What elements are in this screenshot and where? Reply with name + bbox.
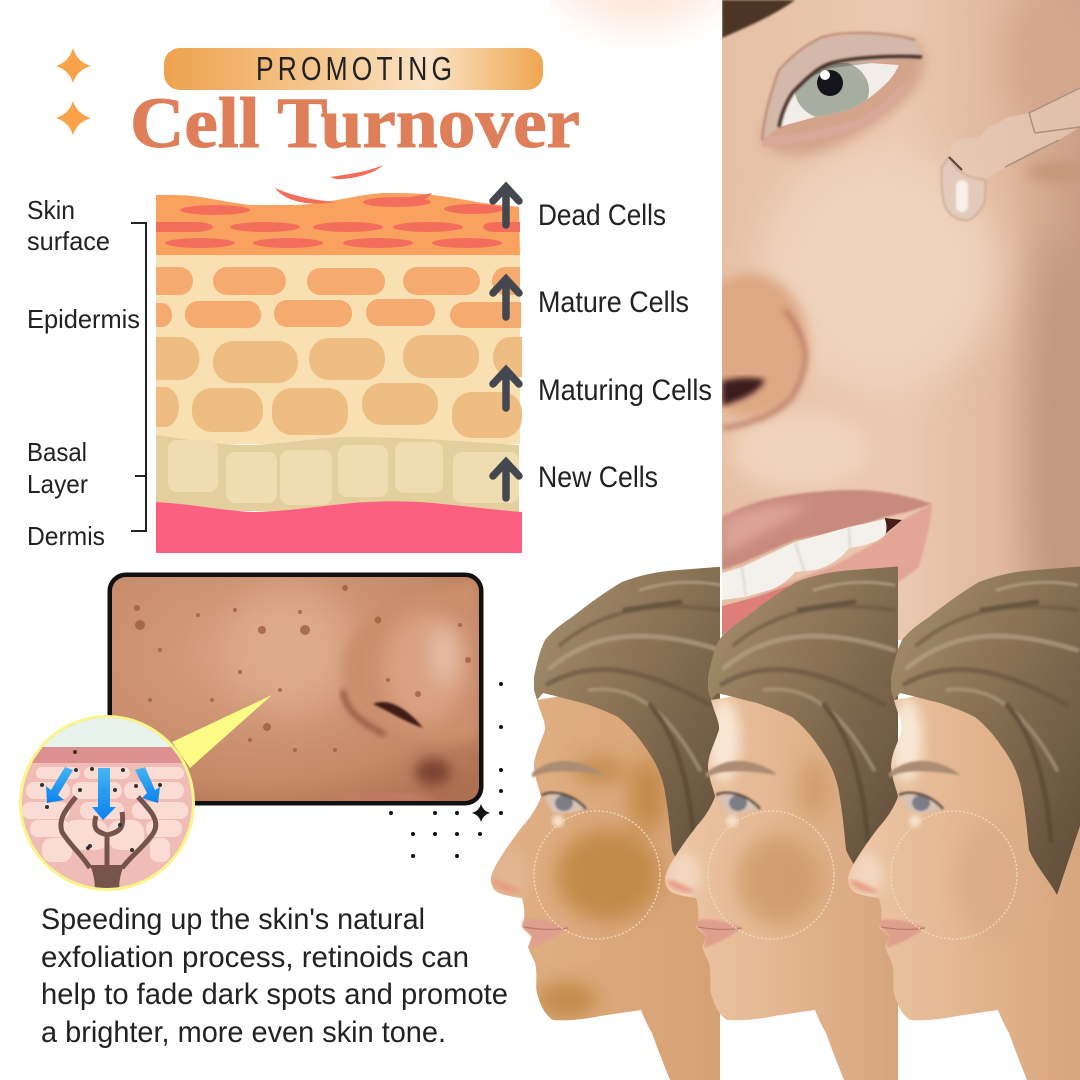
profile photo: during: [665, 566, 904, 1080]
skin layer diagram: [156, 165, 522, 553]
decorative dots and star: [389, 682, 503, 858]
callout pointer: [172, 695, 272, 768]
photo: eye, nose and dropper: [722, 0, 1080, 640]
right labels: Maturing Cells: [538, 374, 712, 407]
left labels: Layer: [27, 469, 88, 499]
icon: sparkle bottom: [56, 101, 91, 135]
bracket: [131, 223, 146, 531]
right labels: [538, 199, 712, 494]
body text: [41, 903, 508, 1049]
skin pore magnifier: [18, 715, 198, 895]
arrows: [493, 187, 519, 498]
right labels: Dead Cells: [538, 199, 666, 232]
body text: help to fade dark spots and promote: [41, 978, 508, 1011]
heading pill: PROMOTING: [256, 51, 452, 88]
icon: sparkle top: [56, 48, 91, 83]
title: Cell Turnover: [130, 83, 580, 163]
body text: exfoliation process, retinoids can: [41, 941, 469, 974]
left labels: [27, 195, 140, 551]
skin close-up photo: [110, 575, 481, 803]
left labels: Basal: [27, 437, 87, 467]
profile photo: before: [480, 566, 730, 1080]
top corner glow: [548, 0, 732, 80]
body text: Speeding up the skin's natural: [41, 903, 425, 936]
left labels: Epidermis: [27, 304, 140, 334]
body text: a brighter, more even skin tone.: [41, 1016, 446, 1049]
left labels: Dermis: [27, 521, 105, 551]
left labels: Skin: [27, 195, 75, 225]
profile photo: after: [848, 566, 1080, 1080]
heading pill: [164, 48, 543, 90]
right labels: New Cells: [538, 461, 658, 494]
left labels: surface: [27, 226, 110, 256]
right labels: Mature Cells: [538, 286, 689, 319]
